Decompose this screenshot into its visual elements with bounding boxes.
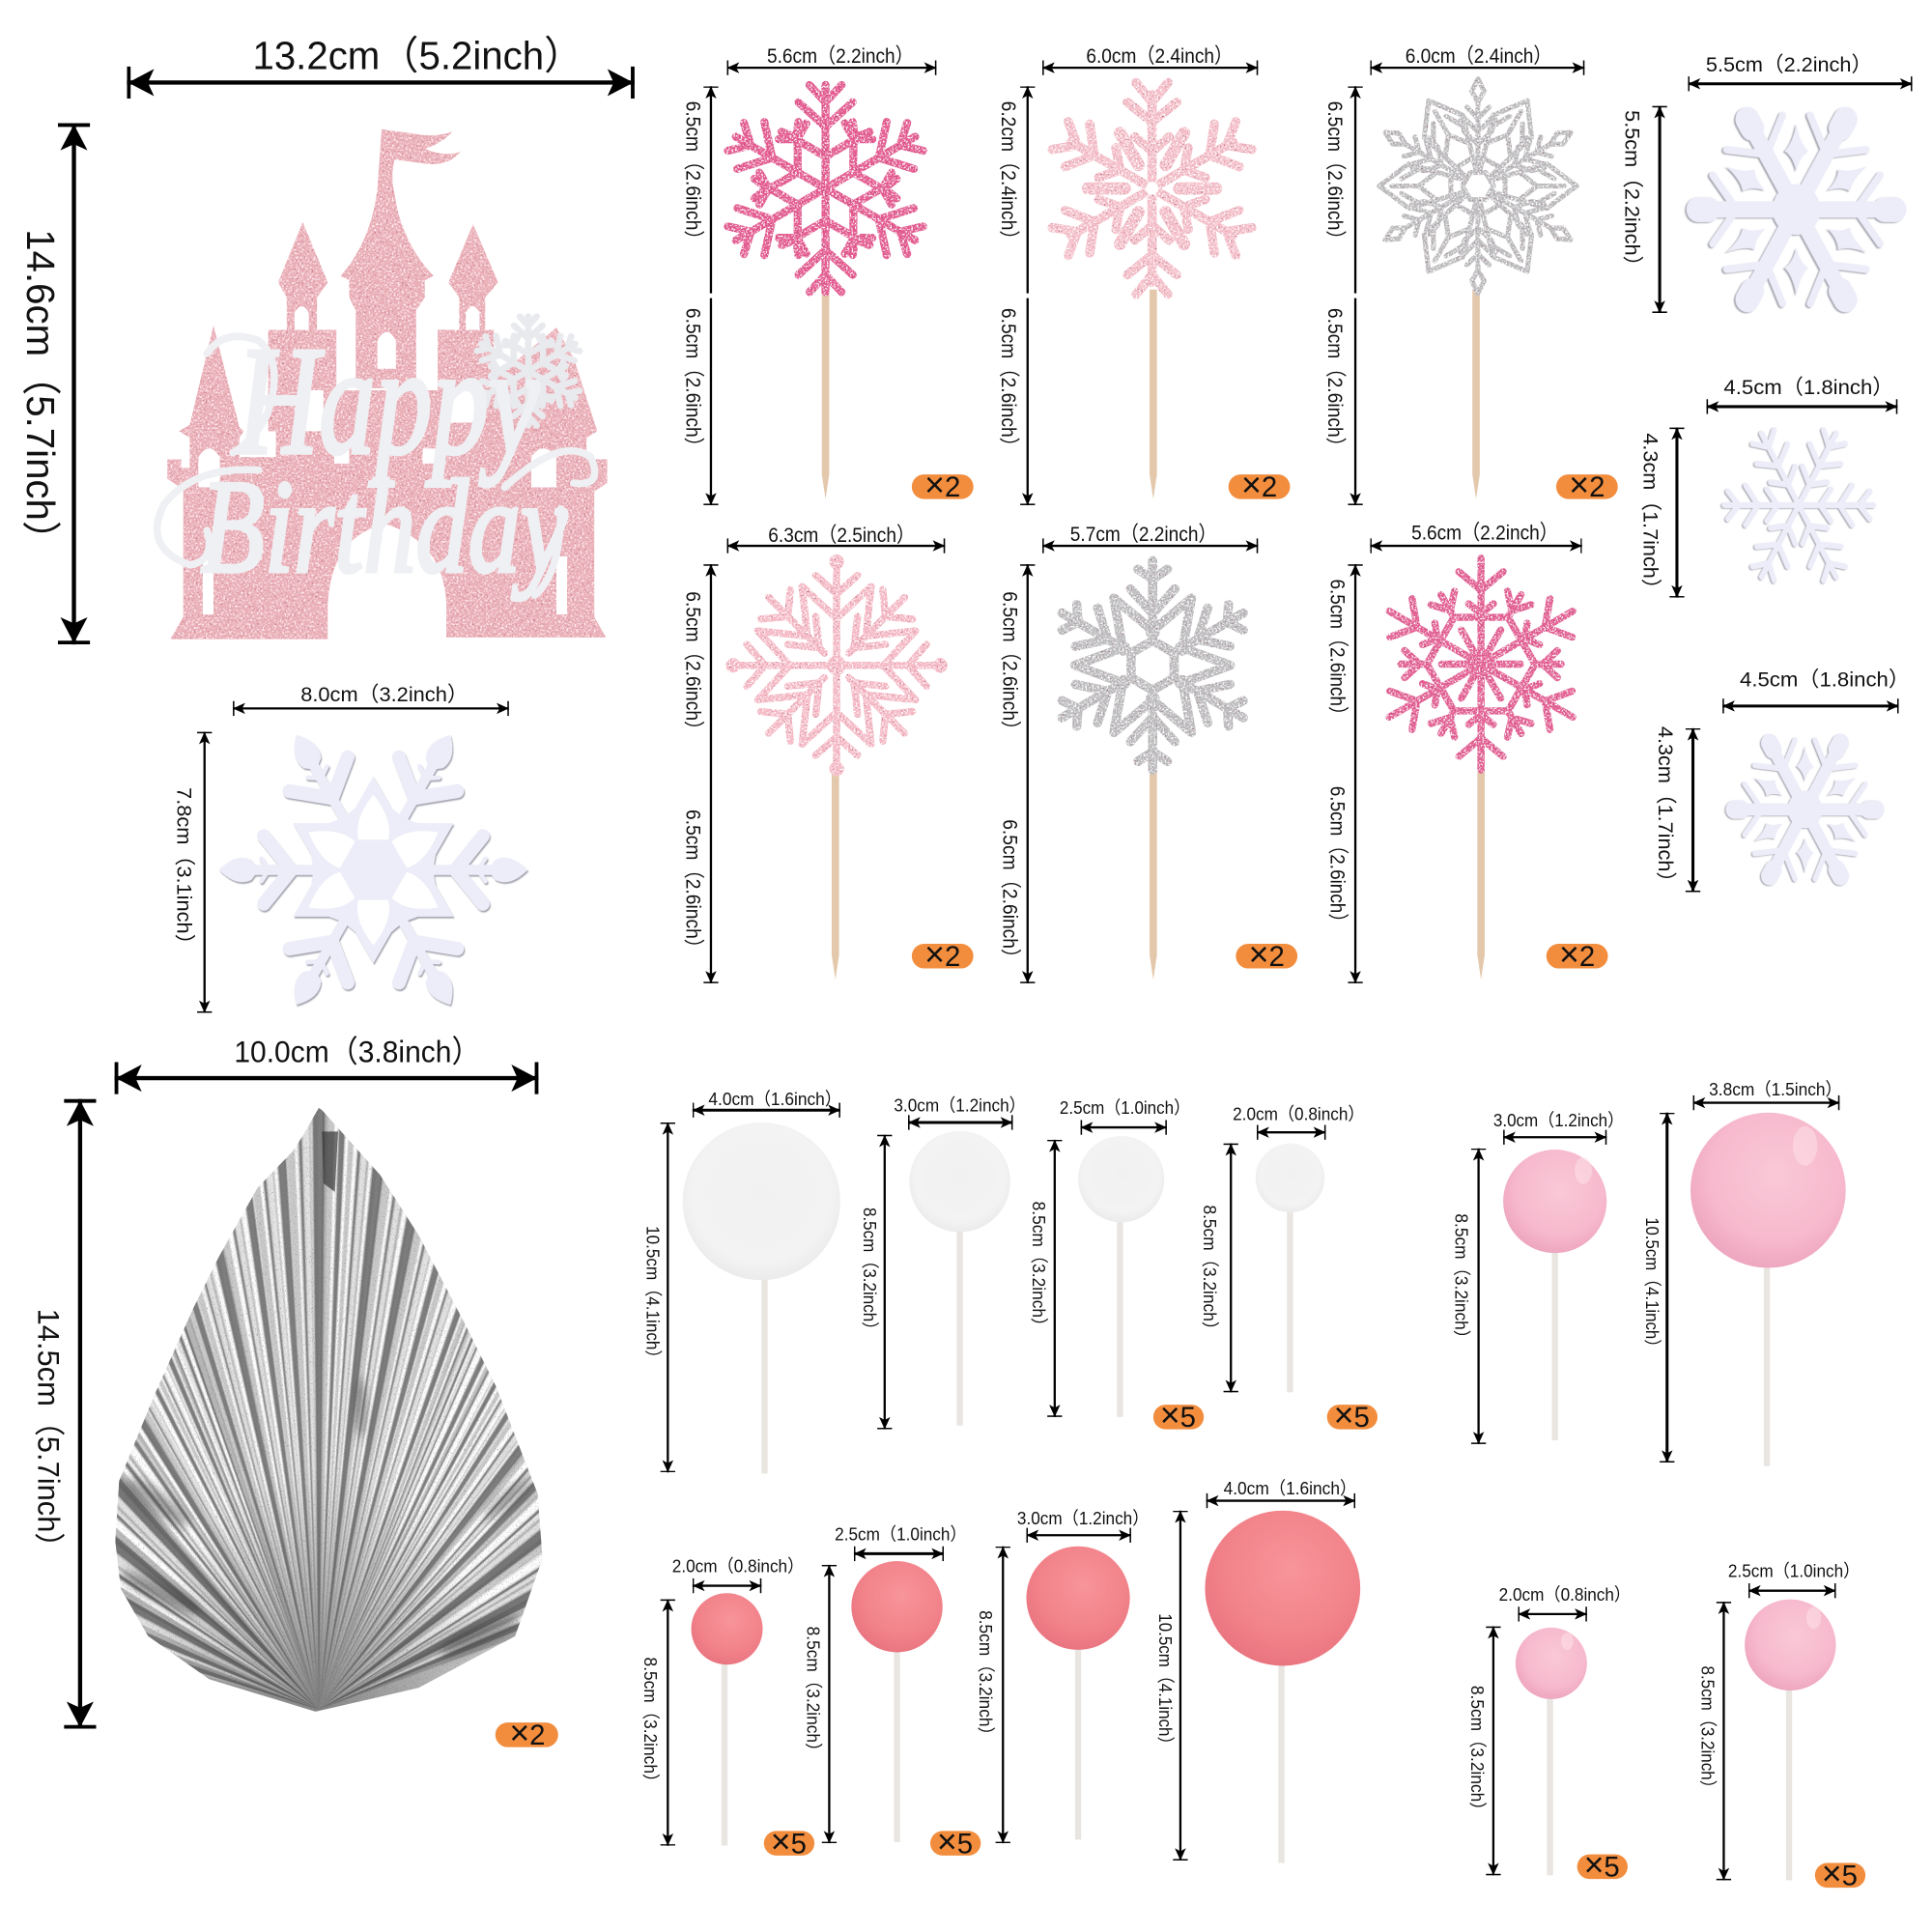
badge: quantity x5: ×5 xyxy=(1584,1846,1620,1885)
icon: coral ball pick xyxy=(692,1593,763,1846)
panel: glitter snowflake pick 1 xyxy=(681,43,974,505)
dimension: width xyxy=(835,1523,967,1553)
dimension: width: 8.0cm（3.2inch） xyxy=(300,682,469,706)
icon: white paper snowflake thin xyxy=(1724,424,1873,586)
icon: hot pink twelve-point snowflake on pick xyxy=(1363,558,1599,980)
panel: glitter snowflake pick 2 xyxy=(997,43,1290,505)
dimension: width: 4.0cm（1.6inch） xyxy=(708,1089,841,1109)
icon: hot pink snowflake on pick xyxy=(713,85,939,499)
dimension: height: 10.5cm（4.1inch） xyxy=(643,1226,664,1367)
dimension: heights: 6.5cm（2.6inch） xyxy=(1326,579,1350,724)
dimension: width: 2.0cm（0.8inch） xyxy=(1233,1103,1365,1123)
icon: white ball pick xyxy=(909,1131,1010,1426)
dimension: heights xyxy=(998,564,1028,983)
dimension: width: 5.7cm（2.2inch） xyxy=(1070,522,1217,546)
dimension: width xyxy=(894,1095,1026,1122)
dimension: width: 2.0cm（0.8inch） xyxy=(672,1556,804,1577)
dimension: width: 2.0cm（0.8inch） xyxy=(1499,1584,1631,1605)
panel: pink ball 2.0cm xyxy=(1467,1584,1631,1885)
dimension: width: 2.5cm（1.0inch） xyxy=(835,1523,967,1544)
dimension: width: 5.5cm（2.2inch） xyxy=(1706,52,1872,76)
dimension: width: 5.6cm（2.2inch） xyxy=(1411,521,1558,545)
icon: white paper snowflake xyxy=(1734,723,1876,896)
panel: castle cake topper xyxy=(18,33,635,644)
dimension: heights: 6.5cm（2.6inch） xyxy=(998,819,1022,967)
dimension: height: 4.3cm（1.7inch） xyxy=(1639,433,1663,600)
icon: pleated silver fan leaf xyxy=(115,1108,543,1712)
panel: white ball 2.5cm xyxy=(1029,1097,1204,1435)
badge: quantity x2 xyxy=(1556,466,1618,504)
dimension: width: 3.0cm（1.2inch） xyxy=(1017,1508,1149,1528)
panel: white ball 4.0cm xyxy=(643,1089,841,1473)
icon: glitter castle with Happy Birthday script: Birthday xyxy=(201,453,568,601)
dimension: heights: 6.2cm（2.4inch） xyxy=(997,101,1021,249)
dimension: width: 4.5cm（1.8inch） xyxy=(1723,375,1893,399)
dimension: width: 6.3cm（2.5inch） xyxy=(768,523,915,547)
dimension: heights: 6.5cm（2.6inch） xyxy=(1326,786,1350,931)
panel: glitter snowflake pick 4 xyxy=(681,523,974,983)
dimension: height: 4.3cm（1.7inch） xyxy=(1654,726,1678,893)
badge: quantity x5: ×5 xyxy=(937,1822,973,1861)
dimension: width: 4.5cm（1.8inch） xyxy=(1740,667,1910,691)
icon: coral ball pick xyxy=(1205,1511,1360,1863)
icon: silver star snowflake on pick xyxy=(1035,560,1270,980)
panel: glitter snowflake pick 5 xyxy=(998,522,1297,983)
dimension: height: 8.5cm（3.2inch） xyxy=(1200,1205,1220,1338)
dimension: heights xyxy=(1326,564,1355,983)
icon: pale pink snowflake on pick xyxy=(1044,82,1260,499)
icon: coral ball pick xyxy=(1026,1547,1130,1839)
dimension: width xyxy=(1017,1508,1149,1535)
badge: quantity x2: ×2 xyxy=(1559,935,1595,974)
dimension: width xyxy=(1499,1584,1631,1614)
dimension: width: 6.0cm（2.4inch） xyxy=(1406,43,1551,68)
dimension: heights: 6.5cm（2.6inch） xyxy=(681,101,705,249)
dimension: width xyxy=(1060,1097,1190,1127)
icon: white ball pick xyxy=(1256,1144,1324,1392)
dimension: height: 8.5cm（3.2inch） xyxy=(976,1610,996,1744)
dimension: width: 2.5cm（1.0inch） xyxy=(1060,1097,1190,1118)
dimension: height: 8.5cm（3.2inch） xyxy=(1029,1202,1049,1334)
icon: white ball pick xyxy=(1078,1136,1164,1417)
dimension: leaf height: 14.5cm（5.7inch） xyxy=(32,1309,67,1562)
badge: quantity x2: ×2 xyxy=(1249,935,1285,974)
badge: quantity x2 xyxy=(1229,466,1290,504)
dimension: width: 3.0cm（1.2inch） xyxy=(1493,1110,1624,1130)
dimension: heights: 6.5cm（2.6inch） xyxy=(1323,308,1348,456)
badge: quantity x2: ×2 xyxy=(509,1714,545,1752)
panel: glitter snowflake pick 6 xyxy=(1326,521,1608,983)
dimension: height: 8.5cm（3.2inch） xyxy=(1697,1665,1718,1797)
panel: coral ball 2.5cm xyxy=(803,1523,980,1861)
dimension: heights xyxy=(997,86,1028,505)
badge: quantity x5: ×5 xyxy=(1334,1396,1370,1435)
panel: paper snowflake 4.5cm top xyxy=(1639,375,1897,600)
dimension: width xyxy=(1728,1561,1860,1591)
panel: large paper snowflake xyxy=(173,682,527,1022)
icon: pale pink eight-arm snowflake on pick xyxy=(729,558,944,980)
dimension: leaf width: 10.0cm（3.8inch） xyxy=(234,1034,480,1068)
badge: quantity x2: ×2 xyxy=(1569,466,1605,504)
dimension: height: 5.5cm（2.2inch） xyxy=(1620,110,1644,276)
badge: quantity x2 xyxy=(912,466,974,504)
dimension: height: 8.5cm（3.2inch） xyxy=(640,1658,661,1790)
icon: pink ball pick xyxy=(1745,1600,1835,1880)
panel: coral ball 3.0cm xyxy=(976,1508,1149,1843)
dimension: width: 3.0cm（1.2inch） xyxy=(894,1095,1026,1116)
panel: pink ball 3.8cm xyxy=(1642,1079,1846,1466)
panel: coral ball 4.0cm xyxy=(1155,1478,1360,1863)
dimension: heights xyxy=(1323,86,1355,505)
dimension: width xyxy=(1493,1110,1624,1137)
dimension: width xyxy=(1233,1103,1365,1132)
dimension: width xyxy=(672,1556,804,1586)
badge: quantity x2: ×2 xyxy=(924,935,960,974)
icon: pink ball pick xyxy=(1690,1113,1846,1466)
dimension: heights: 6.5cm（2.6inch） xyxy=(1323,101,1348,249)
dimension: castle width: 13.2cm（5.2inch） xyxy=(252,33,582,77)
dimension: width: 3.8cm（1.5inch） xyxy=(1709,1079,1842,1099)
badge: quantity x2 xyxy=(1236,935,1297,974)
panel: white ball 3.0cm xyxy=(860,1095,1026,1430)
dimension: height: 8.5cm（3.2inch） xyxy=(1467,1686,1488,1819)
dimension: width: 6.0cm（2.4inch） xyxy=(1086,43,1233,68)
icon: glitter castle with Happy Birthday script xyxy=(157,129,608,639)
dimension: heights: 6.5cm（2.6inch） xyxy=(997,308,1021,456)
panel: paper snowflake 5.5cm xyxy=(1620,52,1913,327)
dimension: height: 10.5cm（4.1inch） xyxy=(1642,1217,1662,1355)
icon: white ball pick xyxy=(683,1122,840,1473)
panel: silver palm leaf xyxy=(32,1034,590,1752)
dimension: castle height: 14.6cm（5.7inch） xyxy=(18,229,63,559)
badge: quantity x2 xyxy=(912,935,974,974)
panel: white ball 2.0cm xyxy=(1200,1103,1378,1435)
dimension: heights: 6.5cm（2.6inch） xyxy=(681,308,705,456)
badge: quantity x5: ×5 xyxy=(771,1822,807,1861)
dimension: height: 7.8cm（3.1inch） xyxy=(173,787,197,955)
icon: pink ball pick xyxy=(1503,1150,1606,1440)
badge: quantity x5: ×5 xyxy=(1822,1855,1858,1893)
dimension: heights xyxy=(681,86,711,505)
badge: quantity x2 xyxy=(1547,935,1608,974)
panel: pink ball 2.5cm xyxy=(1697,1561,1865,1893)
dimension: heights: 6.5cm（2.6inch） xyxy=(681,810,705,957)
dimension: heights xyxy=(681,564,711,983)
dimension: heights: 6.5cm（2.6inch） xyxy=(998,591,1022,739)
panel: pink ball 3.0cm xyxy=(1451,1110,1624,1444)
badge: quantity x5: ×5 xyxy=(1160,1396,1196,1435)
panel: paper snowflake 4.5cm bottom xyxy=(1654,667,1910,896)
dimension: height: 8.5cm（3.2inch） xyxy=(860,1208,880,1338)
badge: quantity x2: ×2 xyxy=(1241,466,1277,504)
dimension: height: 10.5cm（4.1inch） xyxy=(1155,1613,1176,1752)
dimension: width: 4.0cm（1.6inch） xyxy=(1224,1478,1356,1498)
dimension: height: 8.5cm（3.2inch） xyxy=(1451,1213,1471,1347)
badge: quantity x2: ×2 xyxy=(924,466,960,504)
panel: glitter snowflake pick 3 xyxy=(1323,43,1618,505)
dimension: width: 5.6cm（2.2inch） xyxy=(767,43,914,68)
icon: pink ball pick xyxy=(1516,1628,1587,1875)
icon: white paper snowflake with star centre xyxy=(219,718,527,1022)
icon: white paper snowflake xyxy=(1698,93,1894,327)
dimension: width: 2.5cm（1.0inch） xyxy=(1728,1561,1860,1581)
dimension: height: 8.5cm（3.2inch） xyxy=(803,1627,823,1759)
icon: silver lattice snowflake on pick xyxy=(1350,73,1605,499)
icon: coral ball pick xyxy=(851,1561,943,1842)
badge: quantity x2 xyxy=(496,1714,558,1752)
panel: coral ball 2.0cm xyxy=(640,1556,814,1861)
icon: glitter castle with Happy Birthday script: Happy xyxy=(236,315,540,487)
dimension: heights: 6.5cm（2.6inch） xyxy=(681,591,705,739)
